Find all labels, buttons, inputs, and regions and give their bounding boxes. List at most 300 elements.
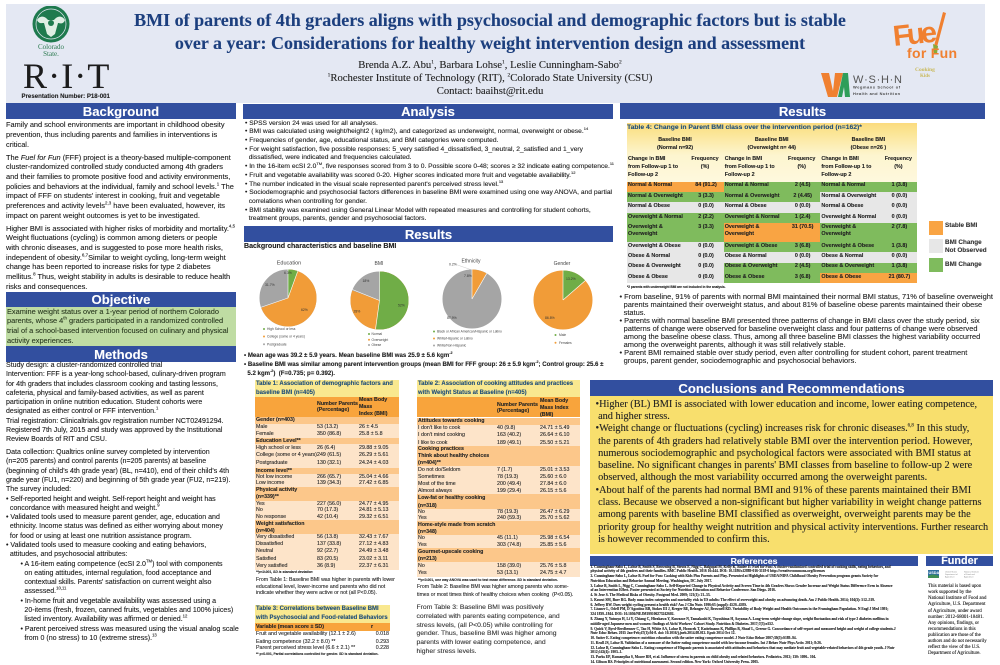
background paragraph 1: prevention, thus including parents and families in interventions is bbox=[6, 130, 217, 138]
legend: BMI change bbox=[929, 258, 982, 272]
subheading: background characteristics: Background characteristics and baseline BMI bbox=[244, 243, 396, 250]
table 2 rows: 200 (49.4) bbox=[497, 481, 521, 487]
heading: Background: Background bbox=[83, 104, 159, 119]
table 1 rows: 27.12 ± 4.83 bbox=[359, 541, 388, 547]
pie: Education: 6.3% bbox=[284, 271, 292, 275]
table 4 column 2 text: Baseline BMI bbox=[755, 137, 788, 143]
table 2 note: times or most times think of healthy choices when cooking (P<0.05). bbox=[417, 592, 573, 598]
table 1 rows: Not low income bbox=[256, 474, 292, 480]
table 1 rows: Very dissatisfied bbox=[256, 534, 294, 540]
table 4 column 3 text: Change in BMI bbox=[821, 156, 859, 162]
references list: 4. St Jeor S. The Medical Risks of Obesity. Postgrad Med. 2009; 121(1): 21–33. bbox=[590, 593, 711, 597]
table 4 column 1 text: Overweight & Obese bbox=[628, 243, 681, 249]
table 4 column 1 text: Normal & Overweight bbox=[628, 193, 683, 199]
table 4 cells bbox=[627, 182, 724, 283]
table 4 column 3 text: (%) bbox=[894, 164, 903, 170]
analysis bullets: • BMI was calculated using weight/height2 ( kg/m2), and categorized as underweight, normal, overweight or obese.14 bbox=[245, 126, 588, 135]
table 4 column 2 text: 2 (4.5) bbox=[795, 182, 810, 188]
analysis bullets: dissatisfied, were indicated and frequencies calculated. bbox=[249, 154, 412, 161]
icon: Colorado State University logo: State. bbox=[43, 50, 59, 58]
results bullets bbox=[620, 292, 993, 365]
results bullets: groups, parent gender, sociodemographic and psychosocial behaviors. bbox=[624, 356, 856, 365]
table 4 column 1 text: Baseline BMI bbox=[658, 137, 692, 143]
heading: Funder bbox=[926, 556, 993, 566]
methods: fruit and vegetable bullet bbox=[20, 598, 233, 623]
table 4 column 1 text: 0 (0.0) bbox=[698, 263, 714, 269]
heading: Methods bbox=[6, 346, 236, 362]
table 2 rows: 25.85 ± 5.6 bbox=[540, 542, 566, 548]
legend: stable BMI bbox=[929, 221, 977, 235]
table 2 rows: 26.15 ± 5.6 bbox=[540, 488, 566, 494]
table 2 rows: 25.98 ± 6.54 bbox=[540, 535, 569, 541]
RIT wordmark: R·I·T bbox=[23, 56, 110, 96]
table 2 rows: 7 (1.7) bbox=[497, 467, 512, 473]
pie: Ethnicity: White/Non-Hispanic bbox=[437, 344, 466, 348]
table 2 title bbox=[417, 380, 580, 397]
table 3 bbox=[255, 605, 390, 656]
table 1 rows: Mean Body bbox=[359, 397, 387, 403]
references list: 324 1839–1844. DOI: 10.1056/NEJM199106273242602. bbox=[590, 612, 674, 616]
icon: USDA logo: National Institute bbox=[964, 570, 980, 574]
table 2 rows bbox=[418, 398, 570, 582]
table 4 column 1 text: 0 (0.0) bbox=[698, 203, 714, 209]
funder statement: Department of Agriculture. bbox=[928, 651, 981, 656]
background paragraph 3: with chronic diseases, and is suggested to pose more health risks, bbox=[6, 243, 223, 252]
heading: References: References bbox=[731, 556, 777, 566]
references list: 12. Lohse B, Cunningham-Sabo L. Eating competence of Hispanic parents is associated with attitudes and behaviors that may mediate fruit and vegetable-related behaviors of 4th grade youth. J Nutr bbox=[590, 646, 895, 650]
table 3 title bbox=[255, 605, 390, 623]
table 1 rows: Low income bbox=[256, 480, 284, 486]
results bullets: patterns of change were observed for baseline overweight class and four patterns of change were observed bbox=[624, 324, 978, 333]
conclusions text: numerous sociodemographic and psychological factors were associated with BMI status at bbox=[598, 448, 971, 459]
table 1 rows: Gender (n=403) bbox=[256, 417, 295, 423]
methods: eating competence bullet: on eating attitudes, internal regulation, food acceptance and bbox=[24, 570, 211, 577]
table 4 column 1 text: Change in BMI bbox=[628, 156, 665, 162]
funder statement: National Institute of Food and bbox=[928, 596, 986, 601]
pie: BMI: Overweight bbox=[372, 338, 388, 342]
methods: trial registration: Registered 7th July, 2015 and study was approved by the Institutional bbox=[6, 427, 222, 434]
icon: WSHN logo: Health and Nutrition bbox=[853, 91, 901, 96]
methods: trial registration bbox=[6, 418, 224, 443]
table 4 column 3 text: 0 (0.0) bbox=[892, 253, 907, 259]
table 1 rows: College (some or 4 years) bbox=[256, 452, 317, 458]
table 1 rows: 29.88 ± 9.05 bbox=[359, 445, 388, 451]
methods: trial registration: Review Boards of RIT and CSU. bbox=[6, 436, 107, 443]
icon: Fuel for Fun logo: Fue bbox=[891, 17, 938, 53]
icon: WSHN logo: W·S·H·N bbox=[853, 74, 902, 86]
icon: USDA logo: of Food and bbox=[964, 574, 975, 576]
table 1 rows: (n=404) bbox=[256, 528, 275, 534]
table 1 rows: 227 (56.0) bbox=[317, 501, 341, 507]
table 2 rows: No bbox=[418, 509, 425, 515]
methods: survey bullets: ethnicity. Income status was defined as either worrying about money bbox=[10, 523, 223, 530]
table 2 title: with Weight Status at Baseline (n=405) bbox=[418, 390, 527, 396]
table 4 column 1 text: 0 (0.0) bbox=[698, 253, 714, 259]
icon: WSHN logo bbox=[821, 73, 902, 97]
table 4 column 2 text: 2 (4.5) bbox=[795, 263, 810, 269]
table 4 column 3 text: Overweight & bbox=[821, 224, 856, 230]
methods: survey bullets: for food or using at least one nutrition assistance program. bbox=[10, 532, 192, 540]
table 3 note bbox=[416, 604, 560, 655]
methods: data collection: (beginning of child's 4th grade year) (BL, n=410), end of their child's 4th bbox=[6, 468, 229, 474]
table 4 column 2 text: 3 (6.8) bbox=[795, 274, 810, 280]
methods: study design: Intervention: FFF is a year-long school-based, culinary-driven program bbox=[6, 371, 226, 378]
table 4 column 3 text: Normal & Overweight bbox=[821, 193, 876, 199]
table 1 rows: 139 (34.3) bbox=[317, 480, 341, 486]
pie: BMI: BMI bbox=[375, 261, 383, 267]
table 4 column 1 text: Overweight & bbox=[628, 224, 663, 230]
table 4 column 3 text: Follow-up 2 bbox=[821, 172, 851, 178]
table 2 bbox=[417, 380, 580, 582]
presentation number: Presentation Number: P18-001 bbox=[22, 93, 110, 100]
references list: 3. Lohse B, Smith L, Nigg C, Cunningham-Sabo L. Self-Reported Change in Physical Activity and Screen Time in 4th Graders Shows Gender Increase and Weight Status Difference Even in Absence bbox=[590, 584, 893, 588]
table 3 rows: Variable (mean score ± SD) bbox=[256, 624, 324, 630]
analysis bullets: • Fruit and vegetable availability was scored 0-20. Higher scores indicated more fruit and vegetable availability.12 bbox=[245, 170, 575, 179]
funder statement: recommendations in this bbox=[928, 627, 976, 632]
table 4 column 3 text: 1 (3.8) bbox=[892, 263, 907, 269]
table 2 rows: Sometimes bbox=[418, 474, 444, 480]
table 4 column 3 text: Normal & Obese bbox=[821, 203, 863, 209]
table 4 column 1 text: 2 (2.2) bbox=[698, 214, 714, 220]
table 4 footnote: *2 parents with underweight BMI are not included in the analysis. bbox=[627, 285, 725, 289]
methods: data collection: (n=205 parents) and control parents (n=205 parents) at baseline bbox=[6, 458, 206, 465]
funder statement: of Agriculture, under award bbox=[928, 609, 982, 614]
references list: 6. Jeffery RW. Does weight cycling present a health risk? Am J Clin Nutr. 1996;63 (suppl): 452S–458S. bbox=[590, 603, 747, 607]
icon: Fuel for Fun logo: Kids bbox=[920, 74, 930, 79]
background paragraph 2: cluster-randomized controlled study conducted among 4th graders bbox=[6, 162, 223, 171]
table 3 rows: 0.018 bbox=[376, 631, 389, 637]
table 1 rows: **p<0.001, SD is standard deviation bbox=[256, 570, 313, 574]
methods: survey bullets: • Self-reported height and weight. Self-report height and weight has bbox=[6, 496, 216, 502]
heading: Results (right): Results bbox=[779, 104, 826, 119]
background paragraph 2: impact of FFF on students' interest in cooking, fruit and vegetable bbox=[6, 191, 220, 200]
conclusions text: is however recommended to confirm this. bbox=[598, 534, 770, 545]
icon: Colorado State University logo: Colorado bbox=[38, 43, 65, 51]
table 1 rows: 266 (65.7) bbox=[317, 474, 341, 480]
table 3 rows: Fruit and vegetable availability (12.1 ± 2.6) bbox=[256, 631, 356, 637]
table 4 column 3 text: 1 (3.8) bbox=[892, 182, 907, 188]
table 1 rows: Dissatisfied bbox=[256, 541, 283, 547]
methods: stress bullet bbox=[20, 626, 239, 642]
baseline summary bullets: 5.2 kgm-2) (F=0.735; p= 0.392). bbox=[247, 368, 335, 376]
table 1 bbox=[255, 380, 399, 574]
funder statement: reflect the view of the U.S. bbox=[928, 645, 980, 650]
table 1 rows: 130 (32.1) bbox=[317, 460, 341, 466]
references list: physical activity of 4th graders and their families. BMC Public Health. 2016 16:444. DOI: 10.1186/s12889-016-3118-6 http://creativecommons.org/licenses bbox=[590, 569, 825, 573]
authors and contact bbox=[328, 59, 652, 97]
icon: Colorado State University logo bbox=[32, 6, 70, 58]
objective text box: parents, whose 4th graders participated in a randomized controlled bbox=[7, 316, 223, 325]
background paragraph 1 bbox=[6, 120, 225, 148]
conclusions text: •Higher (BL) BMI is associated with lower education and income, lower eating competence, bbox=[596, 399, 977, 410]
pie: Gender: Male bbox=[559, 333, 566, 337]
methods: survey bullets: • Validated tools used to measure parent gender, age, education and bbox=[6, 514, 220, 521]
table 2 rows: 303 (74.8) bbox=[497, 542, 521, 548]
table 1 rows: Number Parents bbox=[317, 401, 358, 407]
analysis bullets: • Sociodemographic and psychosocial factors differences in baseline BMI were examined using one way ANOVA, and partial bbox=[245, 189, 612, 196]
table 1 rows: 83 (20.5) bbox=[317, 556, 338, 562]
conclusions panel bbox=[590, 396, 993, 554]
funder statement bbox=[928, 584, 987, 657]
table 4 column 2 text: Overweight bbox=[725, 231, 754, 237]
table 1 rows: 29.32 ± 6.51 bbox=[359, 514, 388, 520]
table 4 column 1 text: Obese & Normal bbox=[628, 253, 670, 259]
background paragraph 3: mellitus.8 Thus, weight stability in adults is desirable to reduce health bbox=[6, 272, 230, 281]
table 4 column 1 text: Normal & Normal bbox=[628, 182, 672, 188]
results bullets: parents maintained their overweight status, and about 81% of baseline obese parents maintained their obese bbox=[624, 300, 982, 309]
table 1 rows: 249 (61.5) bbox=[317, 452, 341, 458]
methods: survey bullets: concordance with measured height and weight.9 bbox=[10, 502, 160, 512]
table 4 column 3 text: 21 (80.7) bbox=[889, 274, 910, 280]
authors and contact: Contact: baaihst@rit.edu bbox=[437, 85, 543, 97]
methods: fruit and vegetable bullet: 20-items (fresh, frozen, canned fruits, vegetables and 100% juices) bbox=[24, 607, 233, 614]
pie: Education: 31.7% bbox=[265, 283, 275, 287]
table 1 rows: 25.04 ± 4.66 bbox=[359, 474, 388, 480]
icon: WSHN logo: Wegmans School of bbox=[853, 84, 901, 90]
pie: BMI: Obese bbox=[372, 343, 381, 347]
references list: 8. Zhang Y, Yatsuya H, Li Y, Chiang C, Hirakawa Y, Kawazoe N, Tamakoshi K, Toyoshima H, Aoyama A. Long-term weight-change slope, weight fluctuation and risk of type 2 diabetes mellitus in bbox=[590, 617, 889, 621]
methods: survey bullets: attitudes, and psychosocial attributes: bbox=[10, 551, 127, 558]
background paragraph 3: risks and consequences. bbox=[6, 282, 87, 291]
table 1 rows: No response bbox=[256, 514, 286, 520]
table 2 rows: Almost always bbox=[418, 488, 452, 494]
pie: Ethnicity: 0.2% bbox=[449, 262, 457, 266]
table 3 title: Table 3: Correlations between Baseline BMI bbox=[256, 606, 379, 612]
background paragraph 1: critical. bbox=[6, 140, 29, 148]
pie: Ethnicity: 7.8% bbox=[464, 274, 472, 278]
table 3 note: stress levels, (all P<0.05) while controlling for bbox=[416, 622, 553, 629]
methods: data collection: The survey included: bbox=[6, 486, 71, 493]
objective text box bbox=[6, 307, 236, 346]
heading: Methods: Methods bbox=[94, 347, 148, 362]
table 2 rows: I don't like to cook bbox=[418, 425, 460, 431]
references list: 2. Cunningham-Sabo L, Lohse B. Fuel for Fun: Cooking with Kids Plus Parents and Play. Presented at Highlights of USDA/NIFA Childhood Obesity Prevention program grants Society for bbox=[590, 574, 878, 578]
table 4 column 1 text: Obese & Overweight bbox=[628, 263, 681, 269]
table 4 column 2 text: Follow-up 2 bbox=[725, 172, 755, 178]
table 4 column 2 text: Normal & Normal bbox=[725, 182, 769, 188]
legend: stable BMI: Stable BMI bbox=[945, 222, 977, 229]
table 1 note: educational level, lower-income and parents who did not bbox=[256, 584, 385, 590]
methods: data collection: Data collection: Qualtrics online survey completed by intervention bbox=[6, 449, 210, 456]
table 2 rows: Gourmet-upscale cooking bbox=[418, 549, 483, 555]
pie: Education bbox=[261, 260, 308, 346]
table 1 rows: Yes bbox=[256, 501, 265, 507]
background paragraph 1: Family and school environments are important in childhood obesity bbox=[6, 120, 225, 128]
pie: Ethnicity: 87.9% bbox=[447, 316, 457, 320]
table 1 rows: Neutral bbox=[256, 548, 273, 554]
conclusions text: the parents of 4th graders had relatively stable BMI over the intervention period. However, bbox=[598, 436, 973, 447]
table 1 rows: (Percentage) bbox=[317, 407, 349, 413]
table 2 rows: (Percentage) bbox=[497, 408, 529, 414]
table 1 title: Table 1: Association of demographic factors and bbox=[256, 381, 393, 387]
table 1 rows: 24.77 ± 4.95 bbox=[359, 501, 388, 507]
table 2 rows: 25.70 ± 5.62 bbox=[540, 515, 569, 521]
table 4 column 1 text: 3 (3.3) bbox=[698, 193, 714, 199]
table 1 rows: Index (BMI) bbox=[359, 411, 388, 417]
icon: Fuel for Fun logo: Cooking bbox=[915, 67, 935, 73]
pie: BMI: Normal bbox=[372, 332, 382, 336]
icon: USDA logo bbox=[927, 569, 989, 579]
table 4 column 3 text: Frequency bbox=[885, 156, 912, 162]
table 1 rows: Female bbox=[256, 431, 274, 437]
table 1 rows: 23.02 ± 3.11 bbox=[359, 556, 388, 562]
table 2 rows: 40 (9.8) bbox=[497, 425, 515, 431]
legend: BMI change not observed bbox=[929, 239, 987, 254]
table 4 column 2 text: 0 (0.0) bbox=[795, 203, 810, 209]
table 4 column 3 text: 1 (3.8) bbox=[892, 243, 907, 249]
table 4 column 2 text: Change in BMI bbox=[725, 156, 762, 162]
table 4 column 3 text: Normal & Normal bbox=[821, 182, 865, 188]
analysis bullets: • In the 16-item ecSI 2.0TM, five responses scored from 3 to 0. Possible score 0-48; scores ≥ 32 indicate eating competence.11 bbox=[245, 161, 614, 170]
legend: BMI change: BMI Change bbox=[945, 261, 982, 268]
table 2 rows: 78 (19.3) bbox=[497, 474, 518, 480]
funder statement: This material is based upon bbox=[928, 584, 981, 589]
table 4 title: Table 4: Change in Parent BMI class over the intervention period (n=162)* bbox=[627, 124, 862, 130]
table 4 column 3 text: Obese & Obese bbox=[821, 274, 861, 280]
pie: BMI: 18% bbox=[362, 279, 369, 283]
table 1 rows: 92 (22.7) bbox=[317, 548, 338, 554]
table 2 rows: 240 (59.3) bbox=[497, 515, 521, 521]
objective text box: trial of a school-based intervention focused on culinary and physical bbox=[7, 326, 228, 335]
heading: Background bbox=[6, 103, 236, 119]
icon: Fuel for Fun logo bbox=[891, 12, 957, 79]
table 4 column 2 text: Normal & Obese bbox=[725, 203, 767, 209]
pie: Education: High School or less bbox=[267, 327, 296, 331]
table 2 rows: Number Parents bbox=[497, 402, 538, 408]
references list: 13. Parks EP, Kumanyika S, Moore RH, et al. Influence of stress in parents on child obesity and related behaviors. Pediatrics. 2012; 130: 1096– 104. bbox=[590, 655, 816, 659]
table 4 column 3 text: Baseline BMI bbox=[852, 137, 885, 143]
authors and contact: 1Rochester Institute of Technology (RIT), 2Colorado State University (CSU) bbox=[328, 72, 652, 84]
table 4 column 2 text: Obese & Obese bbox=[725, 274, 765, 280]
background paragraph 3: Higher BMI is associated with higher risks of morbidity and mortality.4,5 bbox=[6, 223, 235, 232]
pie: BMI bbox=[353, 261, 405, 347]
table 4 column 2 text: Overweight & Normal bbox=[725, 214, 780, 220]
table 2 rows: Yes bbox=[418, 542, 427, 548]
table 2 rows: Attitudes towards cooking bbox=[418, 418, 485, 424]
icon: USDA logo: USDA bbox=[928, 571, 940, 575]
pie: Gender: Females bbox=[559, 341, 572, 345]
table 3 note: correlated with parents eating competence, and bbox=[416, 613, 560, 620]
methods: data collection bbox=[6, 448, 230, 493]
pie: Education: College (some or 4 years) bbox=[267, 335, 305, 339]
results bullets: status. bbox=[624, 308, 646, 317]
methods: eating competence bullet: assessed.10,11 bbox=[24, 586, 66, 595]
table 1 rows: 22.37 ± 6.31 bbox=[359, 563, 388, 569]
table 2 rows: Mean Body bbox=[540, 398, 568, 404]
table 3 note: parents with lower eating competence, and bbox=[416, 639, 546, 646]
table 1 rows: Male bbox=[256, 424, 267, 430]
methods: fruit and vegetable bullet: • In-home fruit and vegetable availability was assessed using a bbox=[20, 598, 216, 605]
icon: Fuel for Fun logo: for Fun bbox=[907, 45, 957, 61]
methods: study design: designated as either control or FFF intervention.1 bbox=[6, 406, 158, 415]
table 1 rows: 350 (86.8) bbox=[317, 431, 341, 437]
table 3 rows: Eating competence (32.2 ± 8.0) ** bbox=[256, 639, 335, 645]
table 3 rows: r bbox=[371, 624, 373, 630]
table 1 rows: Satisfied bbox=[256, 556, 276, 562]
table 4 column 1 text: Overweight & Normal bbox=[628, 214, 683, 220]
table 4 column 1 text: Normal & Obese bbox=[628, 203, 670, 209]
analysis bullets bbox=[245, 120, 614, 222]
table 2 rows: 25.01 ± 3.53 bbox=[540, 467, 569, 473]
table 2 rows: 24.71 ± 5.49 bbox=[540, 425, 569, 431]
table 1 rows: 24.81 ± 5.13 bbox=[359, 507, 388, 513]
table 1 rows: Education Level** bbox=[256, 438, 301, 444]
pie: BMI: 28% bbox=[354, 310, 360, 314]
table 2 rows: Think about healthy choices bbox=[418, 453, 489, 459]
table 4 bbox=[627, 123, 917, 283]
table 4 column 3 text: 0 (0.0) bbox=[892, 193, 907, 199]
methods: data collection: grade year (FU1, n=220) and beginning of 5th grade year (FU2, n=219). bbox=[6, 477, 230, 484]
baseline summary bullets bbox=[244, 350, 604, 376]
icon: USDA logo: Agriculture bbox=[964, 576, 974, 578]
references list: of an Intervention Effect. Poster presented at Society for Nutrition Education and Behavior Conference. San Diego. 2016. bbox=[590, 588, 776, 592]
table 1 rows: 137 (33.8) bbox=[317, 541, 341, 547]
conclusions text: •About half of the parents had normal BMI and 91% of these parents maintained their BMI bbox=[596, 485, 971, 496]
methods: study design: Study design: a cluster-randomized controlled trial bbox=[6, 362, 162, 369]
table 4 column 1 text: Frequency bbox=[691, 156, 719, 162]
pie: Education: 62% bbox=[301, 308, 308, 312]
pie charts bbox=[260, 258, 592, 348]
references list: 10. Satter E. Eating competence: nutrition education with the satter eating competence model. J Nutr Educ Behav 2007;39(5):S189–94. bbox=[590, 636, 797, 640]
pie: Gender: 13.2% bbox=[566, 277, 576, 281]
table 2 rows: I don't mind cooking bbox=[418, 432, 465, 438]
heading: Results (middle) bbox=[244, 226, 613, 242]
background paragraph 3: change has been reported to increase risks for type 2 diabetes bbox=[6, 262, 211, 271]
references list: 14. Gibson RS. Principles of nutritional assessment. Second edition. New York: Oxford University Press. 2005. bbox=[590, 660, 759, 664]
table 1 note bbox=[256, 577, 395, 596]
table 2 rows: 26.64 ± 6.10 bbox=[540, 432, 569, 438]
title: BMI of parents of 4th graders aligns with psychosocial and demographic factors but is stable bbox=[134, 10, 846, 30]
methods: study design: cafeteria, physical and family-based activities, as well as parent bbox=[6, 390, 204, 397]
baseline summary bullets: • Mean age was 39.2 ± 5.9 years. Mean baseline BMI was 25.9 ± 5.6 kgm-2 bbox=[244, 350, 453, 358]
table 3 note: gender. Thus, baseline BMI was higher among bbox=[416, 630, 557, 637]
table 4 column 1 text: Follow-up 2 bbox=[628, 172, 658, 178]
pie: BMI: 52% bbox=[398, 304, 405, 308]
table 2 rows: (n=318) bbox=[418, 503, 437, 509]
table 1 rows: 32.43 ± 7.67 bbox=[359, 534, 388, 540]
pie: Ethnicity: Black or African American/Hispanic or Latino bbox=[437, 330, 502, 334]
title bbox=[134, 10, 846, 53]
conclusions text: among parents with baseline BMI classified as overweight, overweight parents may be the bbox=[598, 509, 971, 520]
table 2 title: Table 2: Association of cooking attitudes and practices bbox=[418, 381, 573, 387]
table 2 rows: 45 (11.1) bbox=[497, 535, 518, 541]
analysis bullets: • BMI stability was examined using General Linear Model with repeated measures and controlling for student cohorts, bbox=[245, 207, 591, 214]
background paragraph 2: policies and behaviors at the individual, family and school levels.1 The bbox=[6, 181, 234, 191]
table 4 column 2 text: Obese & Overweight bbox=[725, 263, 777, 269]
funder statement: work supported by the bbox=[928, 590, 971, 595]
table 1 rows: Postgraduate bbox=[256, 460, 288, 466]
table 2 rows: 25.50 ± 5.21 bbox=[540, 440, 569, 446]
table 3 note: higher stress levels. bbox=[416, 648, 477, 655]
table 2 rows: Cooking practices bbox=[418, 446, 464, 452]
authors and contact: Brenda A.Z. Abu1, Barbara Lohse1, Leslie Cunningham-Sabo2 bbox=[358, 59, 622, 71]
table 2 rows: 199 (29.4) bbox=[497, 488, 521, 494]
table 2 rows: Yes bbox=[418, 515, 427, 521]
analysis bullets: • Frequencies of gender, age, educational status, and BMI categories were computed. bbox=[245, 137, 498, 144]
table 3 rows bbox=[256, 624, 389, 656]
table 4 column 3 text: 2 (7.8) bbox=[892, 224, 907, 230]
conclusions text: baseline. No significant changes in parents' BMI classes from baseline to follow-up 2 were bbox=[598, 460, 972, 471]
background paragraph 2: impact on parent weight outcomes is yet to be investigated. bbox=[6, 211, 200, 220]
table 4 column 3 text: (Obese n=26 ) bbox=[851, 145, 886, 151]
methods: study design bbox=[6, 362, 226, 415]
table 4 column 3 text: Overweight & Obese bbox=[821, 243, 874, 249]
table 4 column 1 text: 84 (91.2) bbox=[695, 182, 717, 188]
funder statement: publication are those of the bbox=[928, 633, 981, 638]
table 3 rows: Parent perceived stress level (6.6 ± 2.1) ** bbox=[256, 645, 355, 651]
methods: stress bullet: from 0 (no stress) to 10 (extreme stress).13 bbox=[24, 632, 157, 642]
references list: 5. Kawut SM, Barr RG. Body mass index categories and mortality risk in US adults: The effect of overweight and obesity on advancing death. Am J Public Health. 2014; 104(3): 512–519. bbox=[590, 598, 875, 602]
